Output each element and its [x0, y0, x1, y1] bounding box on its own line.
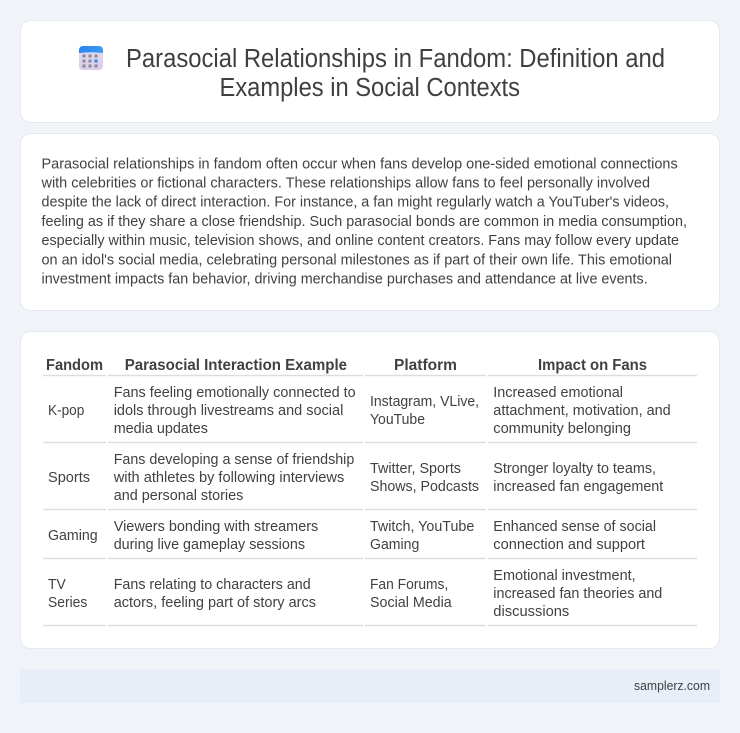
icon: calendar: [79, 46, 103, 70]
table row: TV Series: [48, 567, 662, 620]
table row: Gaming: [48, 518, 656, 553]
heading: Parasocial Relationships in Fandom: Definition and: [126, 45, 665, 73]
table row: K-pop: media updates: [114, 420, 208, 437]
table row: TV Series: actors, feeling part of story arcs: [114, 594, 316, 611]
table row: Sports: with athletes by following interviews: [113, 469, 344, 486]
table row: TV Series: Social Media: [370, 594, 452, 611]
table row: Gaming: connection and support: [493, 536, 646, 553]
table row: Gaming: Viewers bonding with streamers: [114, 518, 318, 535]
text block: description: Parasocial relationships in fandom often occur when fans develop one-sided emotional connections: [42, 155, 678, 172]
table row: Gaming: Enhanced sense of social: [493, 518, 656, 535]
footer: samplerz.com: [634, 679, 710, 693]
table row: K-pop: Instagram, VLive,: [370, 393, 479, 410]
table row: Sports: [48, 451, 664, 504]
table row: TV Series: Fans relating to characters and: [114, 576, 311, 593]
table header: Parasocial Interaction Example: [125, 357, 347, 374]
table row: Gaming: Gaming: [370, 536, 419, 553]
table header: Fandom: [46, 357, 103, 374]
text block: description: [41, 155, 687, 288]
table row: K-pop: YouTube: [370, 411, 425, 428]
table row: TV Series: discussions: [493, 603, 569, 620]
text block: description: with celebrities or fictional characters. These relationships allow fans to feel personally involved: [41, 174, 650, 192]
table row: K-pop: K-pop: [48, 402, 84, 419]
table row: K-pop: [48, 384, 671, 437]
table row: TV Series: Emotional investment,: [493, 567, 636, 584]
table row: TV Series: Series: [48, 594, 87, 611]
table row: K-pop: Fans feeling emotionally connected to: [114, 384, 356, 401]
text block: description: on an idol's social media, celebrating personal milestones as if part of their own life. This emotional: [42, 251, 672, 268]
table row: Sports: Sports: [48, 469, 90, 486]
table row: K-pop: attachment, motivation, and: [493, 402, 671, 419]
text block: description: investment impacts fan behavior, driving merchandise purchases and attendance at live events.: [42, 270, 648, 288]
table row: Sports: Shows, Podcasts: [370, 478, 479, 495]
table row: K-pop: Increased emotional: [493, 384, 623, 401]
panel: title: [20, 20, 720, 122]
text block: description: especially within music, television shows, and online content creators. Fans may follow every update: [42, 232, 679, 249]
table row: TV Series: Fan Forums,: [370, 576, 448, 593]
table row: Gaming: Twitch, YouTube: [370, 518, 474, 535]
table header: Platform: [394, 357, 457, 374]
table row: Sports: Fans developing a sense of friendship: [114, 451, 354, 468]
table row: K-pop: idols through livestreams and social: [114, 402, 343, 419]
table row: Gaming: during live gameplay sessions: [114, 536, 305, 553]
table row: Sports: increased fan engagement: [493, 478, 664, 495]
panel: description: [20, 134, 720, 310]
heading: Examples in Social Contexts: [220, 74, 520, 102]
text block: description: feeling as if they share a close friendship. Such parasocial bonds are common in media consumption,: [42, 213, 687, 230]
heading: [126, 45, 665, 102]
panel: table: [20, 332, 720, 648]
table row: Sports: Stronger loyalty to teams,: [493, 460, 656, 477]
table row: K-pop: community belonging: [493, 420, 631, 437]
table row: Sports: and personal stories: [114, 487, 243, 504]
footer: [20, 669, 720, 703]
text block: description: despite the lack of direct interaction. For instance, a fan might regularly watch a YouTuber's videos,: [42, 194, 669, 211]
table row: Sports: Twitter, Sports: [370, 460, 461, 477]
table header: [46, 357, 647, 374]
table row: TV Series: increased fan theories and: [493, 585, 662, 602]
table row: TV Series: TV: [48, 576, 66, 593]
table row: Gaming: Gaming: [48, 527, 98, 544]
table header: Impact on Fans: [538, 357, 647, 374]
